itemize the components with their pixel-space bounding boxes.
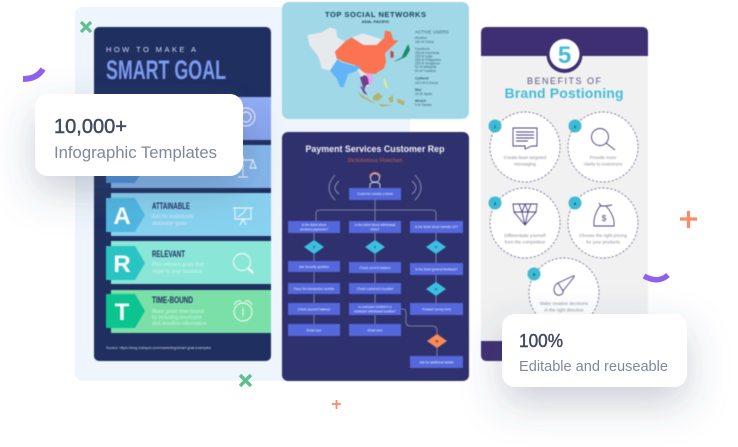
box: declined payments question: declined payments? bbox=[300, 228, 328, 232]
column 1 steps: Trace the transaction number bbox=[294, 287, 334, 291]
heading: smart goal: SMART GOAL bbox=[106, 55, 226, 85]
box: customer creates a ticket: Customer creates a ticket bbox=[357, 192, 393, 196]
box: withdrawal limits question: Is the ticket about withdrawal bbox=[355, 223, 395, 227]
box: website UX question: Is the ticket about website UX? bbox=[415, 225, 458, 229]
benefit 1: messaging bbox=[514, 162, 536, 166]
benefit 3 bbox=[488, 188, 560, 258]
benefit 4: $ bbox=[602, 214, 607, 223]
number badge 5: 5 bbox=[558, 42, 571, 69]
column 2 steps: Is customer located in a bbox=[358, 305, 392, 309]
decision diamond: no: N bbox=[436, 338, 439, 344]
box: declined payments question: Is the ticket about bbox=[302, 223, 326, 227]
legend: active users: 18.5 M S.Korea bbox=[415, 81, 438, 85]
benefit 1: Create laser-targeted bbox=[504, 155, 547, 160]
column 1 steps: Check account balance bbox=[298, 308, 331, 312]
band: attainable bbox=[106, 193, 271, 236]
number badge 5 bbox=[546, 37, 582, 73]
box: withdrawal limits question: limits? bbox=[371, 228, 380, 232]
legend: active users: CyWorld bbox=[415, 76, 428, 80]
benefit 3: from the competition bbox=[505, 240, 546, 244]
callout number: 10,000+ bbox=[54, 116, 127, 138]
box: website UX question bbox=[410, 221, 463, 233]
decision diamonds: yes bbox=[304, 240, 446, 296]
column 1 steps: Email user bbox=[307, 328, 321, 332]
benefit 3: Differentiate yourself bbox=[504, 233, 546, 238]
benefit 4: for your products bbox=[586, 240, 621, 244]
subheading: asia-pacific: ASIA- PACIFIC bbox=[362, 19, 389, 24]
connectors bbox=[314, 200, 437, 356]
header band bbox=[481, 27, 648, 56]
decision diamonds: yes: Y bbox=[313, 244, 316, 250]
heading: brand postioning: Brand Postioning bbox=[504, 85, 624, 101]
callout number: 100% bbox=[519, 331, 563, 351]
benefit 1: 1 bbox=[494, 124, 497, 129]
band: relevant: Pick relevant goals that bbox=[152, 262, 204, 268]
column 3 steps: Forward survey form bbox=[422, 308, 451, 312]
column 3 steps bbox=[410, 263, 463, 368]
benefit 4: Choose the right pricing bbox=[579, 233, 627, 238]
icon: green cross top bbox=[81, 22, 91, 32]
heading: flowchart title: Payment Services Customer Rep bbox=[306, 144, 445, 154]
column 2 steps: Check current balance bbox=[359, 266, 391, 270]
icon: customer service agent bbox=[329, 172, 421, 200]
band: relevant: R bbox=[113, 251, 131, 278]
legend: active users: Wretch bbox=[415, 99, 426, 103]
benefit 3: 3 bbox=[494, 201, 497, 206]
column 3 steps: Is the ticket general feedback? bbox=[415, 268, 458, 272]
band: attainable: A bbox=[113, 203, 131, 230]
source note: Source: https://blog.hubspot.com/marketing/smart-goal-examples bbox=[106, 346, 211, 350]
background panel bbox=[75, 7, 410, 381]
legend: active users: 5 M Taiwan bbox=[415, 103, 432, 107]
legend: active users: 253 M Singapore bbox=[415, 62, 440, 66]
band: time-bound bbox=[106, 290, 271, 333]
band: specific bbox=[106, 97, 271, 140]
icon: purple arc right bbox=[644, 275, 668, 280]
legend: active users: RenRen bbox=[415, 36, 427, 40]
band: attainable: attainable goals bbox=[152, 221, 188, 227]
band: relevant: RELEVANT bbox=[152, 249, 185, 260]
panel: payment services flowchart bbox=[282, 132, 469, 381]
benefit 2: 2 bbox=[574, 124, 577, 129]
heading: how to make a: HOW TO MAKE A bbox=[106, 45, 196, 54]
benefit 2: Provide more bbox=[590, 155, 617, 160]
icon: purple arc left bbox=[23, 69, 43, 79]
legend: active users: 253 M India bbox=[415, 54, 432, 58]
benefit 4 bbox=[568, 188, 638, 258]
map bbox=[307, 27, 410, 107]
legend: active users: 253 M Philippines bbox=[415, 58, 441, 62]
benefit 5: in the right direction bbox=[544, 308, 584, 312]
benefit 5: Make creative decisions bbox=[540, 301, 589, 306]
column 2 steps bbox=[349, 262, 401, 336]
decision diamonds: yes: Y bbox=[435, 286, 438, 292]
panel: benefits of brand positioning bbox=[481, 27, 648, 361]
benefit 5 bbox=[528, 258, 599, 328]
decision diamonds: yes: Y bbox=[374, 244, 377, 250]
callout label: Editable and reuseable bbox=[519, 358, 668, 375]
legend: active users: ACTIVE USERS bbox=[415, 30, 449, 34]
box: withdrawal limits question bbox=[349, 221, 401, 233]
legend: active users: 16 M Japan bbox=[415, 92, 432, 96]
benefit 4: 4 bbox=[574, 201, 577, 206]
benefit 2: clarity to customers bbox=[584, 162, 623, 166]
band: time-bound: T bbox=[115, 299, 130, 326]
band: attainable: Aim for realistically bbox=[152, 214, 194, 220]
icon: green cross bottom bbox=[240, 375, 251, 386]
benefit 5: 5 bbox=[533, 272, 536, 277]
band: time-bound: Make goals time-bound bbox=[152, 309, 204, 315]
benefit 2 bbox=[568, 112, 638, 182]
decision diamond: no bbox=[427, 334, 447, 348]
callout label: Infographic Templates bbox=[54, 144, 217, 162]
box: customer creates a ticket bbox=[349, 188, 401, 200]
decision diamonds: yes: Y bbox=[435, 244, 438, 250]
legend: active users: 181 M China bbox=[415, 40, 434, 44]
subheading: dichotomous flowchart: Dichotomous Flowchart bbox=[348, 158, 403, 164]
heading: benefits of: BENEFITS OF bbox=[527, 76, 602, 86]
legend: active users: 51 M Malaysia bbox=[415, 65, 436, 69]
column 1 steps bbox=[288, 261, 340, 336]
band: attainable: ATTAINABLE bbox=[152, 201, 190, 212]
band: measurable bbox=[106, 145, 271, 188]
column 2 steps: Check customer's location bbox=[357, 287, 394, 291]
column 2 steps: restricted withdrawal location? bbox=[354, 310, 396, 314]
band: time-bound: and deadline information bbox=[152, 321, 207, 327]
panel: smart goal infographic bbox=[94, 27, 271, 361]
legend: active users: 253 M Indonesia bbox=[415, 51, 440, 55]
band: relevant: relate to your business bbox=[152, 269, 203, 275]
callout: 10,000+ infographic templates bbox=[35, 94, 243, 176]
column 2 steps: Email user bbox=[368, 328, 382, 332]
heading: top social networks: TOP SOCIAL NETWORKS bbox=[325, 10, 426, 19]
box: declined payments question bbox=[288, 221, 340, 233]
panel: top social networks map bbox=[282, 2, 469, 119]
footer band bbox=[481, 341, 520, 361]
icon: orange plus right bbox=[680, 211, 697, 228]
column 3 steps: Ask for additional details bbox=[419, 360, 454, 364]
legend: active users bbox=[415, 30, 449, 107]
band: time-bound: by including timeframe bbox=[152, 315, 202, 321]
band: time-bound: TIME-BOUND bbox=[152, 295, 193, 306]
benefit 1 bbox=[488, 112, 560, 182]
callout: 100% editable and reuseable bbox=[502, 314, 687, 387]
column 1 steps: Ask Security question bbox=[299, 265, 329, 269]
icon: orange plus small bbox=[332, 400, 341, 409]
legend: active users: Facebook bbox=[415, 47, 430, 51]
legend: active users: 50 M Thailand bbox=[415, 69, 436, 73]
legend: active users: Mixi bbox=[415, 88, 421, 92]
band: relevant bbox=[106, 241, 271, 284]
